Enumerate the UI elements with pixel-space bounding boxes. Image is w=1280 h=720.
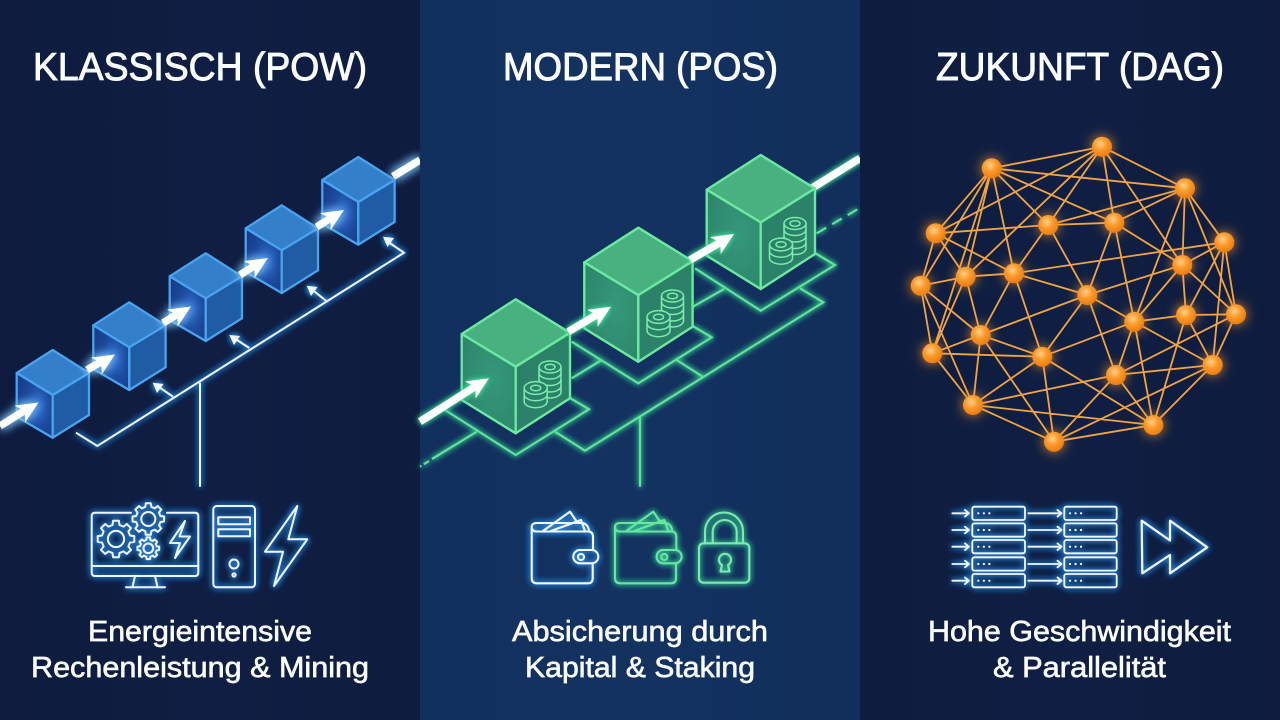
panel: Klassisch (PoW): [0, 0, 420, 720]
staking platforms and bus lines: [420, 209, 858, 487]
icon: parallel server rows: [952, 507, 1117, 587]
network nodes: [911, 137, 1246, 452]
DAG network graph: [911, 137, 1246, 452]
green block cubes with coin stacks: [462, 155, 815, 433]
network edges: [921, 147, 1236, 442]
heading: Modern: MODERN (POS): [503, 46, 778, 89]
caption: Zukunft: Hohe Geschwindigkeit: [928, 616, 1231, 648]
chain arrows: [0, 202, 349, 426]
heading: Zukunft: ZUKUNFT (DAG): [936, 46, 1224, 89]
caption: Modern: Kapital & Staking: [525, 652, 755, 684]
caption: Modern: [512, 616, 768, 684]
panel: Modern (PoS): [420, 0, 860, 720]
panel: Zukunft (DAG): [860, 0, 1280, 720]
caption: Klassisch: Energieintensive: [88, 616, 312, 648]
green chain arrows: [420, 226, 739, 422]
bracket network with arrows: [76, 237, 404, 487]
green chain line end: [812, 158, 860, 188]
caption: Modern: Absicherung durch: [512, 616, 768, 648]
heading: Klassisch: KLASSISCH (POW): [33, 46, 367, 89]
caption: Zukunft: [928, 616, 1231, 684]
blue block cubes: [17, 157, 395, 438]
icon: green wallet: [615, 512, 682, 583]
caption: Klassisch: [31, 616, 369, 684]
blue chain line end: [393, 160, 420, 176]
caption: Zukunft: & Parallelität: [993, 652, 1166, 684]
icon: white wallet: [532, 512, 598, 583]
icon: mining computer, tower and bolt: [92, 503, 307, 587]
caption: Klassisch: Rechenleistung & Mining: [31, 652, 369, 684]
icon: fast forward: [1142, 521, 1207, 573]
icon: padlock: [699, 512, 749, 583]
